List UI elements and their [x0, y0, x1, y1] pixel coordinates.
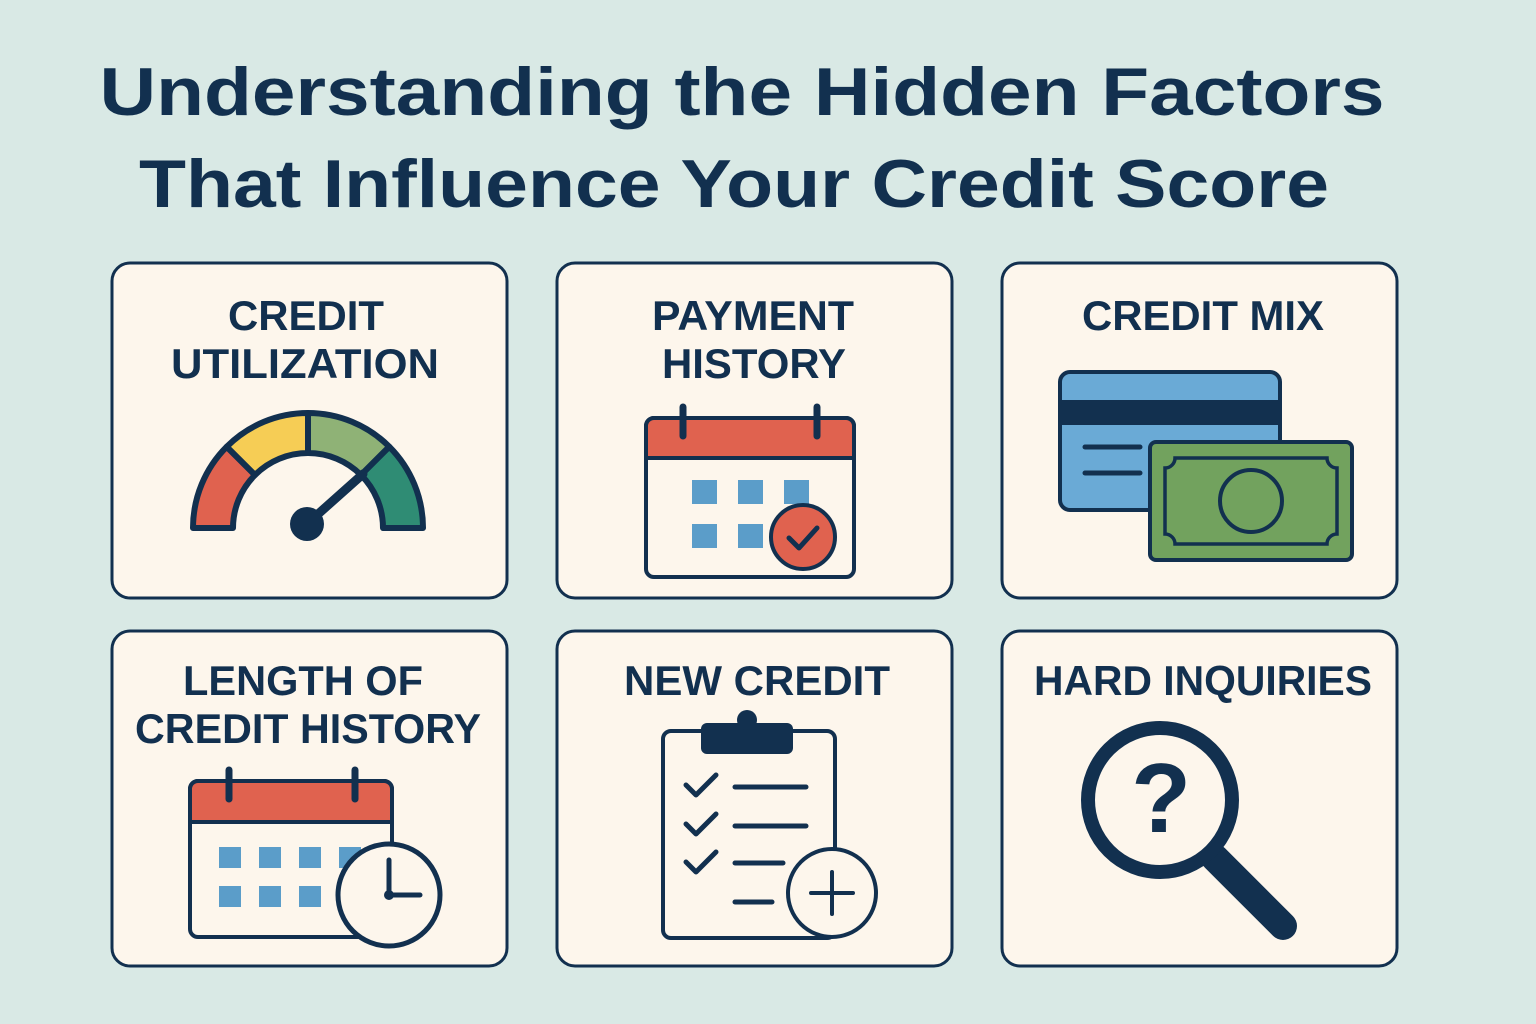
heading: length of credit history: CREDIT HISTORY [135, 705, 481, 752]
heading: length of credit history: LENGTH OF [183, 657, 423, 704]
heading: credit utilization [171, 292, 439, 387]
heading: hard inquiries: HARD INQUIRIES [1034, 657, 1372, 704]
panel: new credit [557, 631, 952, 966]
heading: credit mix: CREDIT MIX [1082, 292, 1324, 339]
title: That Influence Your Credit Score [139, 146, 1329, 222]
heading: credit utilization: CREDIT [228, 292, 384, 339]
heading: payment history: PAYMENT [652, 292, 854, 339]
icon: magnifier with question mark [1088, 728, 1283, 926]
icon: calendar with clock [190, 770, 440, 946]
heading: length of credit history [135, 657, 481, 752]
icon: clipboard with plus [663, 710, 876, 938]
panel: credit utilization [112, 263, 507, 598]
title [100, 54, 1384, 222]
icon: gauge [193, 413, 423, 541]
panel: credit mix [1002, 263, 1397, 598]
icon: card and cash [1060, 372, 1352, 560]
panel: payment history [557, 263, 952, 598]
heading: credit utilization: UTILIZATION [171, 340, 439, 387]
title: Understanding the Hidden Factors [100, 54, 1384, 130]
heading: payment history: HISTORY [662, 340, 846, 387]
icon: magnifier with question mark: ? [1131, 743, 1191, 853]
panel: hard inquiries [1002, 631, 1397, 966]
heading: new credit: NEW CREDIT [624, 657, 890, 704]
heading: payment history [652, 292, 854, 387]
panel: length of credit history [112, 631, 507, 966]
icon: calendar with check [646, 407, 854, 577]
